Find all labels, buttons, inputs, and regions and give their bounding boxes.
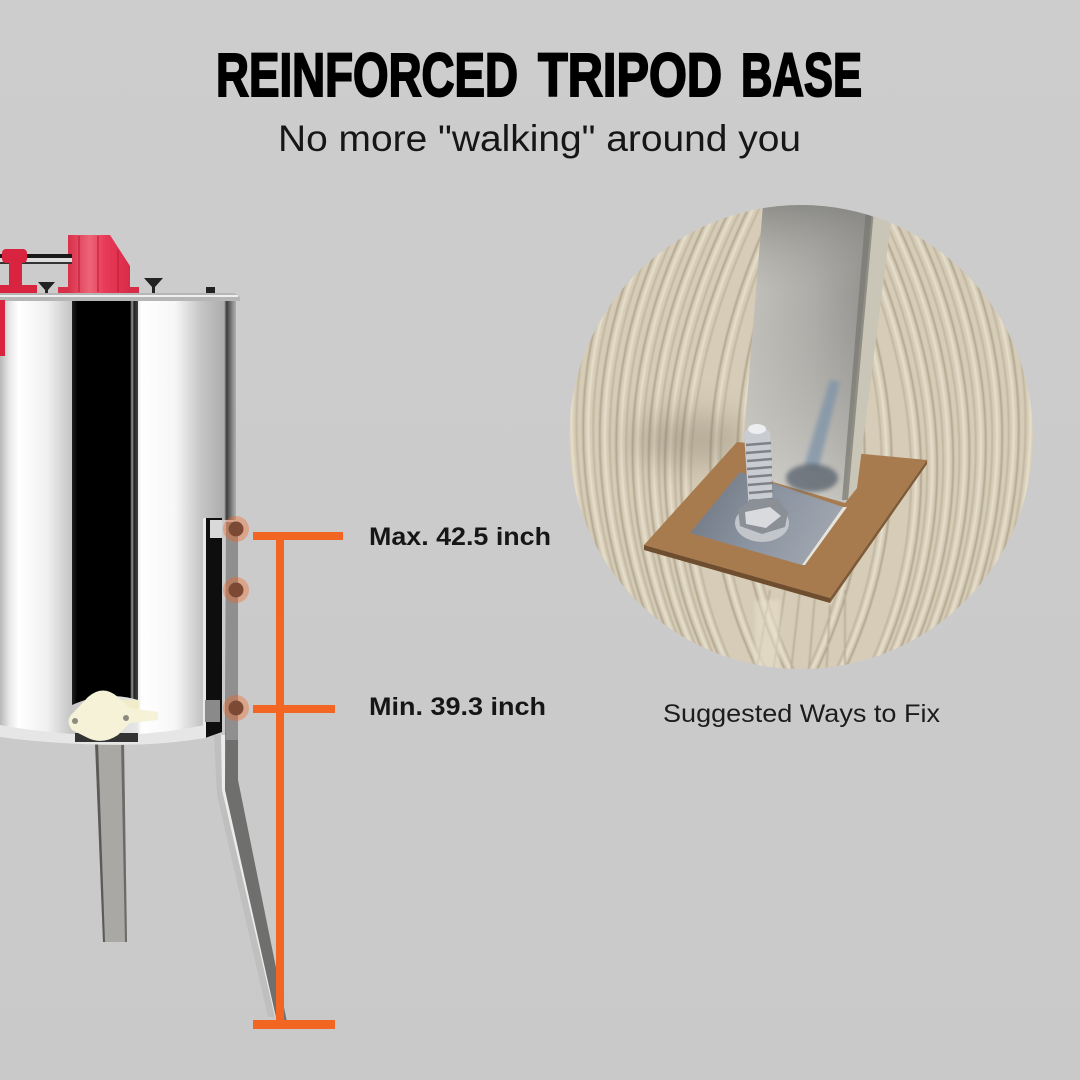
label: minimum height: Min. 39.3 inch [369, 693, 546, 721]
rear leg with height-adjustment holes [214, 522, 287, 1022]
red crank post [0, 249, 37, 356]
lid rim [0, 293, 240, 301]
subtitle: No more "walking" around you [278, 118, 801, 159]
label: maximum height: Max. 42.5 inch [369, 523, 551, 551]
tank body [0, 300, 236, 750]
honey gate valve [68, 690, 158, 742]
wooden mounting board [644, 442, 927, 603]
red gearbox [58, 235, 139, 293]
height adjustment holes highlighted [223, 516, 249, 721]
front leg [95, 742, 127, 942]
product: honey extractor [0, 235, 287, 1022]
threaded bolt and hex nut [735, 424, 789, 542]
inset photo: leg bolted to wood [569, 205, 1033, 669]
caption: suggested ways to fix: Suggested Ways to Fix [663, 700, 941, 728]
lid knobs [38, 278, 215, 293]
wood floor [569, 208, 1033, 669]
orange height dimension bracket [253, 532, 343, 1029]
square steel leg [745, 205, 891, 503]
title: REINFORCED [216, 41, 518, 109]
title: BASE [741, 41, 862, 109]
crank rod [0, 254, 72, 264]
steel base plate [690, 472, 843, 565]
title: TRIPOD [538, 41, 722, 109]
